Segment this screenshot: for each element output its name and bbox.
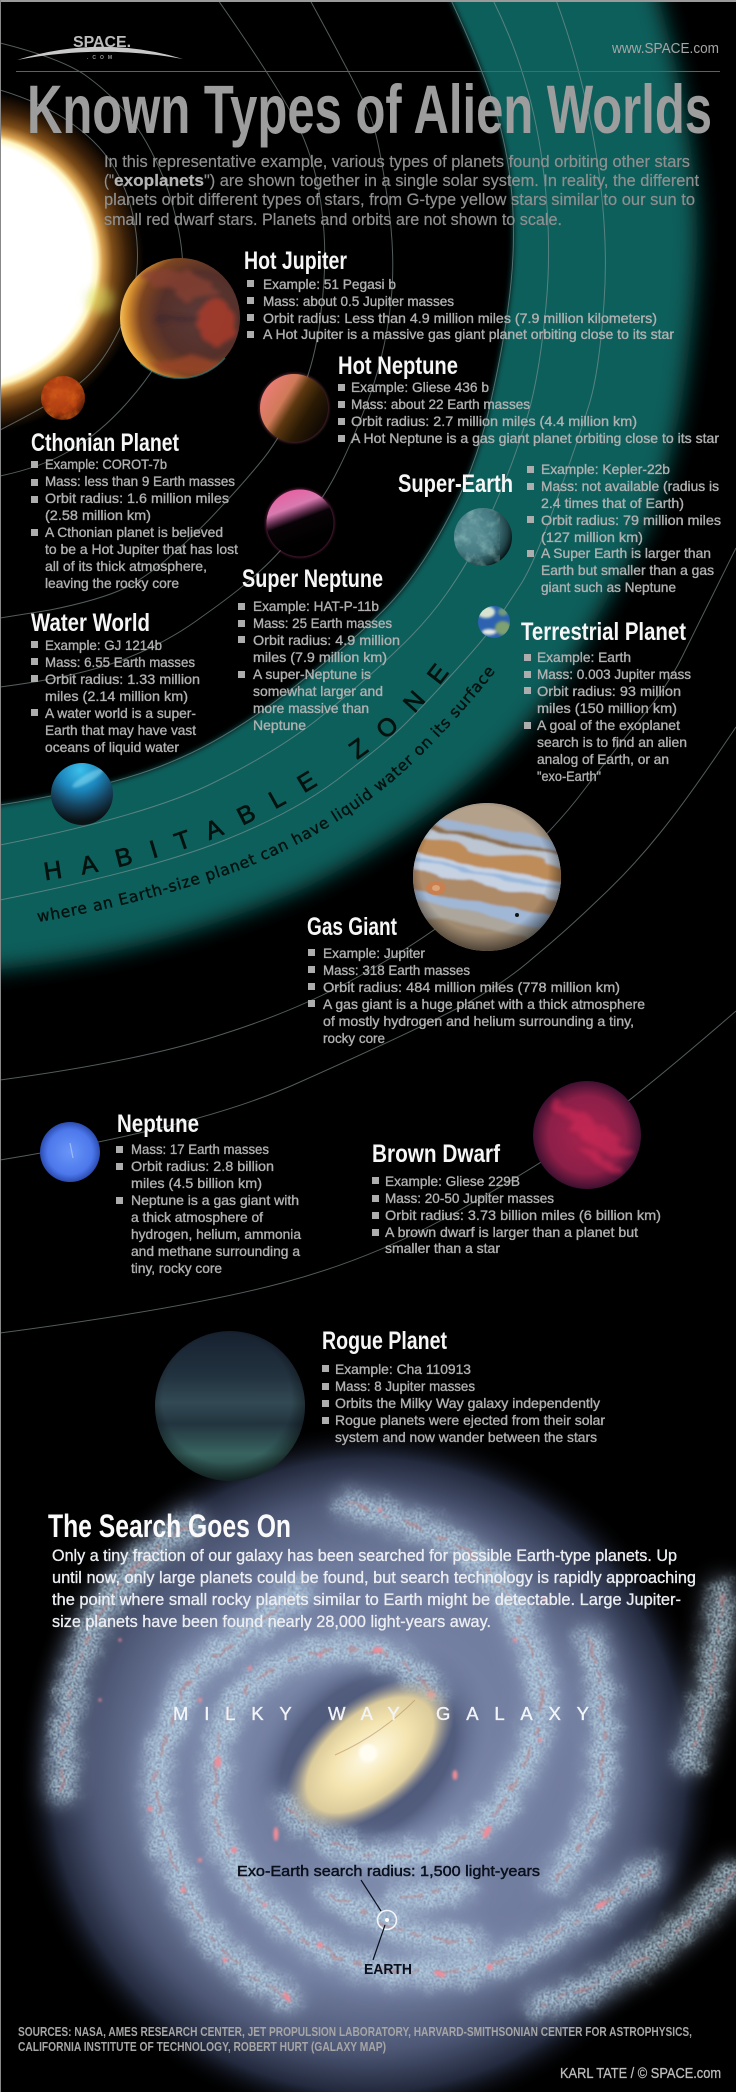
facts: gas giant: Example: Jupiter	[323, 945, 425, 961]
callout: earth: EARTH	[364, 1961, 412, 1978]
facts: rogue planet: Mass: 8 Jupiter masses	[335, 1378, 475, 1394]
facts: hot jupiter: Orbit radius: Less than 4.9 million miles (7.9 million kilometers)	[263, 310, 657, 326]
facts: super neptune: Neptune	[253, 717, 306, 733]
facts: brown dwarf: Mass: 20-50 Jupiter masses	[385, 1190, 554, 1206]
text: the search goes on: until now, only large planets could be found, but search technology is rapidly approaching	[52, 1569, 696, 1587]
logo: SPACE.com: .COM	[87, 55, 112, 61]
callout: earth	[364, 1925, 412, 1978]
facts: water world: Mass: 6.55 Earth masses	[45, 654, 195, 670]
facts: rogue planet	[322, 1361, 605, 1445]
planet: super neptune	[266, 488, 334, 558]
callout: exo-earth search radius	[237, 1863, 540, 1930]
facts: super neptune: Orbit radius: 4.9 million	[253, 632, 400, 648]
planet: hot jupiter	[120, 258, 240, 378]
facts: hot neptune: Example: Gliese 436 b	[351, 379, 489, 395]
facts: terrestrial planet: "exo-Earth"	[537, 768, 601, 784]
facts: super neptune	[238, 598, 400, 733]
facts: gas giant: Mass: 318 Earth masses	[323, 962, 470, 978]
website url: www.SPACE.com	[611, 40, 719, 57]
facts: gas giant	[308, 945, 645, 1046]
logo: SPACE.com: SPACE.	[73, 34, 131, 51]
facts: gas giant: Orbit radius: 484 million miles (778 million km)	[323, 979, 620, 995]
sources: CALIFORNIA INSTITUTE OF TECHNOLOGY, ROBERT HURT (GALAXY MAP)	[18, 2040, 386, 2054]
heading: water world: Water World	[31, 609, 150, 637]
intro text: planets orbit different types of stars, from G-type yellow stars similar to our sun to	[104, 191, 695, 209]
intro text: ") are shown together in a single solar system. In reality, the different	[204, 172, 699, 190]
text: the search goes on: the point where small rocky planets similar to Earth might be detectable. Large Jupiter-	[52, 1591, 681, 1609]
planet: brown dwarf	[533, 1081, 641, 1189]
facts: super neptune: somewhat larger and	[253, 683, 383, 699]
facts: super neptune: more massive than	[253, 700, 369, 716]
facts: water world	[31, 637, 200, 755]
facts: brown dwarf: Orbit radius: 3.73 billion miles (6 billion km)	[385, 1207, 661, 1223]
facts: hot jupiter: Mass: about 0.5 Jupiter masses	[263, 293, 454, 309]
milky way galaxy image	[16, 1423, 732, 2092]
heading: brown dwarf: Brown Dwarf	[372, 1140, 501, 1168]
panel: brown dwarf	[372, 1140, 661, 1256]
facts: rogue planet: Example: Cha 110913	[335, 1361, 471, 1377]
panel: neptune	[116, 1110, 301, 1276]
facts: brown dwarf	[372, 1173, 661, 1256]
heading: rogue planet: Rogue Planet	[322, 1327, 448, 1355]
planet: neptune	[40, 1122, 100, 1182]
facts: terrestrial planet: Orbit radius: 93 million	[537, 683, 681, 699]
planet: rogue	[155, 1331, 305, 1481]
facts: neptune	[116, 1141, 301, 1276]
facts: hot jupiter	[247, 276, 674, 342]
facts: cthonian planet: Orbit radius: 1.6 million miles	[45, 490, 229, 506]
facts: super-earth: Orbit radius: 79 million miles	[541, 512, 721, 528]
heading: hot jupiter: Hot Jupiter	[244, 247, 347, 275]
heading: the search goes on: The Search Goes On	[48, 1508, 291, 1544]
facts: terrestrial planet	[524, 649, 691, 784]
facts: gas giant: of mostly hydrogen and helium surrounding a tiny,	[323, 1013, 634, 1029]
facts: hot jupiter: A Hot Jupiter is a massive gas giant planet orbiting close to its star	[263, 326, 674, 342]
facts: terrestrial planet: search is to find an alien	[537, 734, 687, 750]
facts: super neptune: Mass: 25 Earth masses	[253, 615, 392, 631]
label: milky way galaxy: MILKY WAY GALAXY	[173, 1703, 589, 1724]
facts: cthonian planet: A Cthonian planet is believed	[45, 524, 223, 540]
panel: cthonian planet	[31, 429, 238, 591]
facts: hot neptune: Mass: about 22 Earth masses	[351, 396, 530, 412]
logo: SPACE.com	[17, 34, 183, 61]
facts: super-earth: A Super Earth is larger than	[541, 545, 711, 561]
facts: water world: Example: GJ 1214b	[45, 637, 162, 653]
facts: brown dwarf: A brown dwarf is larger than a planet but	[385, 1224, 638, 1240]
text: the search goes on: size planets have been found nearly 28,000 light-years away.	[52, 1613, 491, 1631]
facts: terrestrial planet: Mass: 0.003 Jupiter mass	[537, 666, 691, 682]
planet: cthonian	[41, 376, 85, 420]
panel: water world	[31, 609, 200, 755]
facts: super-earth: Mass: not available (radius is	[541, 478, 719, 494]
facts: cthonian planet: Example: COROT-7b	[45, 456, 167, 472]
intro text: In this representative example, various types of planets found orbiting other stars	[104, 153, 690, 171]
planet: water world	[51, 763, 113, 825]
facts: super neptune: miles (7.9 million km)	[253, 649, 387, 665]
star with glow	[0, 90, 144, 434]
facts: terrestrial planet: Example: Earth	[537, 649, 631, 665]
facts: neptune: a thick atmosphere of	[131, 1209, 263, 1225]
facts: neptune: Mass: 17 Earth masses	[131, 1141, 269, 1157]
facts: water world: Orbit radius: 1.33 million	[45, 671, 200, 687]
habitable zone label: HABITABLE ZONE	[44, 662, 450, 880]
facts: rogue planet: Rogue planets were ejected from their solar	[335, 1412, 605, 1428]
heading: super neptune: Super Neptune	[242, 565, 383, 593]
facts: hot neptune: A Hot Neptune is a gas giant planet orbiting close to its star	[351, 430, 719, 446]
facts: cthonian planet	[31, 456, 238, 591]
heading: terrestrial planet: Terrestrial Planet	[521, 618, 687, 646]
facts: neptune: tiny, rocky core	[131, 1260, 222, 1276]
habitable zone label: where an Earth-size planet can have liquid water on its surface	[37, 668, 494, 922]
panel: hot neptune	[338, 352, 719, 446]
facts: neptune: miles (4.5 billion km)	[131, 1175, 262, 1191]
heading: cthonian planet: Cthonian Planet	[31, 429, 180, 457]
orbit lines	[0, 0, 736, 1333]
facts: water world: oceans of liquid water	[45, 739, 179, 755]
facts: water world: A water world is a super-	[45, 705, 196, 721]
text: the search goes on: Only a tiny fraction of our galaxy has been searched for possible Earth-type planets. Up	[52, 1547, 677, 1565]
panel: terrestrial planet	[521, 618, 691, 784]
planet: jupiter gas giant	[413, 803, 561, 951]
facts: terrestrial planet: miles (150 million km)	[537, 700, 677, 716]
panel: gas giant	[307, 913, 645, 1046]
facts: super-earth	[527, 461, 721, 595]
facts: water world: Earth that may have vast	[45, 722, 196, 738]
facts: neptune: Orbit radius: 2.8 billion	[131, 1158, 274, 1174]
facts: super-earth: Example: Kepler-22b	[541, 461, 670, 477]
intro text: small red dwarf stars. Planets and orbits are not shown to scale.	[104, 211, 562, 229]
callout: exo-earth search radius: Exo-Earth search radius: 1,500 light-years	[237, 1863, 540, 1880]
facts: super-earth: Earth but smaller than a gas	[541, 562, 714, 578]
planet: earth	[477, 606, 511, 638]
facts: hot neptune	[338, 379, 719, 446]
panel: rogue planet	[322, 1327, 605, 1445]
facts: terrestrial planet: A goal of the exoplanet	[537, 717, 680, 733]
facts: neptune: Neptune is a gas giant with	[131, 1192, 299, 1208]
facts: cthonian planet: all of its thick atmosphere,	[45, 558, 207, 574]
facts: brown dwarf: smaller than a star	[385, 1240, 500, 1256]
heading: gas giant: Gas Giant	[307, 913, 398, 941]
facts: cthonian planet: to be a Hot Jupiter that has lost	[45, 541, 238, 557]
intro text: ("	[104, 172, 114, 190]
text: the search goes on	[52, 1547, 696, 1631]
facts: gas giant: A gas giant is a huge planet with a thick atmosphere	[323, 996, 645, 1012]
planet: hot neptune	[259, 373, 329, 443]
facts: terrestrial planet: analog of Earth, or an	[537, 751, 669, 767]
facts: rogue planet: system and now wander between the stars	[335, 1429, 597, 1445]
panel: hot jupiter	[244, 247, 674, 342]
facts: neptune: and methane surrounding a	[131, 1243, 300, 1259]
panel: super-earth	[398, 461, 721, 595]
facts: cthonian planet: leaving the rocky core	[45, 575, 179, 591]
facts: gas giant: rocky core	[323, 1030, 385, 1046]
heading: neptune: Neptune	[117, 1110, 199, 1138]
habitable zone band	[0, 0, 697, 972]
facts: cthonian planet: (2.58 million km)	[45, 507, 151, 523]
facts: hot jupiter: Example: 51 Pegasi b	[263, 276, 396, 292]
panel: super neptune	[238, 565, 400, 733]
facts: rogue planet: Orbits the Milky Way galaxy independently	[335, 1395, 600, 1411]
facts: super neptune: A super-Neptune is	[253, 666, 371, 682]
heading: super-earth: Super-Earth	[398, 470, 513, 498]
facts: hot neptune: Orbit radius: 2.7 million miles (4.4 million km)	[351, 413, 637, 429]
intro text: exoplanets	[114, 172, 204, 190]
heading: hot neptune: Hot Neptune	[338, 352, 458, 380]
facts: super neptune: Example: HAT-P-11b	[253, 598, 379, 614]
sources	[18, 2025, 692, 2054]
facts: water world: miles (2.14 million km)	[45, 688, 188, 704]
facts: cthonian planet: Mass: less than 9 Earth masses	[45, 473, 235, 489]
facts: super-earth: giant such as Neptune	[541, 579, 676, 595]
facts: neptune: hydrogen, helium, ammonia	[131, 1226, 301, 1242]
facts: super-earth: 2.4 times that of Earth)	[541, 495, 684, 511]
intro text	[104, 153, 699, 229]
facts: brown dwarf: Example: Gliese 229B	[385, 1173, 520, 1189]
planet: super earth	[454, 508, 512, 566]
facts: super-earth: (127 million km)	[541, 529, 643, 545]
